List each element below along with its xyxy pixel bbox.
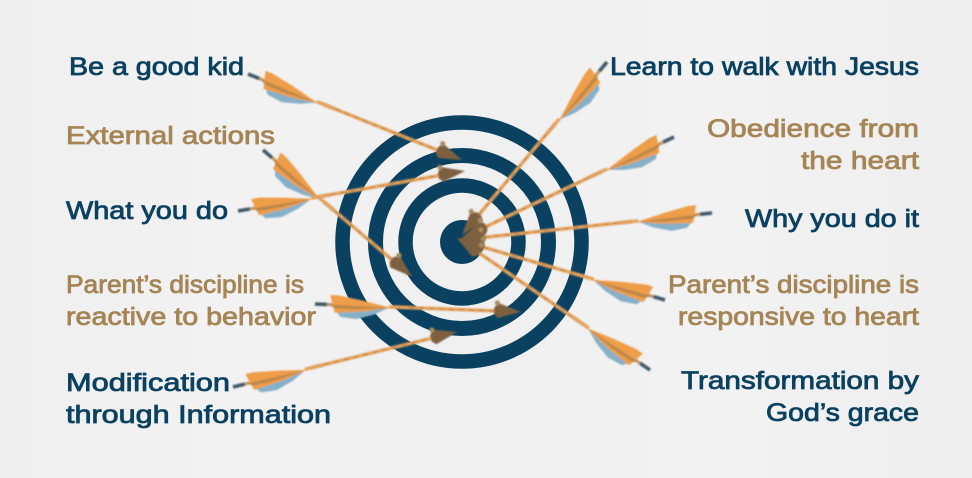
arrow: what you do xyxy=(236,161,467,224)
label: parent's discipline reactive: reactive to behavior xyxy=(66,303,316,331)
arrow: obedience from the heart xyxy=(458,127,680,250)
label: modification through information xyxy=(66,369,331,429)
label: be a good kid: Be a good kid xyxy=(69,53,244,81)
label: obedience from the heart xyxy=(707,115,919,175)
arrow: modification through information xyxy=(230,322,460,400)
label: parent's discipline responsive: Parent’s discipline is xyxy=(668,271,919,299)
label: transformation by god's grace: Transformation by xyxy=(681,367,920,395)
label: modification through information: Modification xyxy=(66,369,230,397)
label: what you do: What you do xyxy=(66,197,228,225)
arrow: learn to walk with jesus xyxy=(454,55,617,244)
label: external actions: External actions xyxy=(66,122,275,150)
arrow: be a good kid xyxy=(243,64,466,173)
label: parent's discipline responsive xyxy=(668,271,919,331)
label: transformation by god's grace: God’s grace xyxy=(766,399,919,427)
label: modification through information: through Information xyxy=(66,401,331,429)
arrow: why you do it xyxy=(457,202,713,254)
label: transformation by god's grace xyxy=(681,367,920,427)
label: parent's discipline reactive xyxy=(66,271,316,331)
arrow: parent's discipline is reactive xyxy=(314,293,521,325)
target xyxy=(342,122,582,362)
arrow: parent's discipline is responsive xyxy=(454,230,668,313)
label: parent's discipline reactive: Parent’s discipline is xyxy=(66,271,304,299)
arrow: transformation by god's grace xyxy=(449,229,656,381)
label: obedience from the heart: Obedience from xyxy=(707,115,919,143)
label: parent's discipline responsive: responsive to heart xyxy=(678,303,919,331)
label: obedience from the heart: the heart xyxy=(801,147,919,175)
label: learn to walk with jesus: Learn to walk with Jesus xyxy=(610,53,919,81)
arrow: external actions xyxy=(254,142,419,287)
label: why you do it: Why you do it xyxy=(745,205,919,233)
